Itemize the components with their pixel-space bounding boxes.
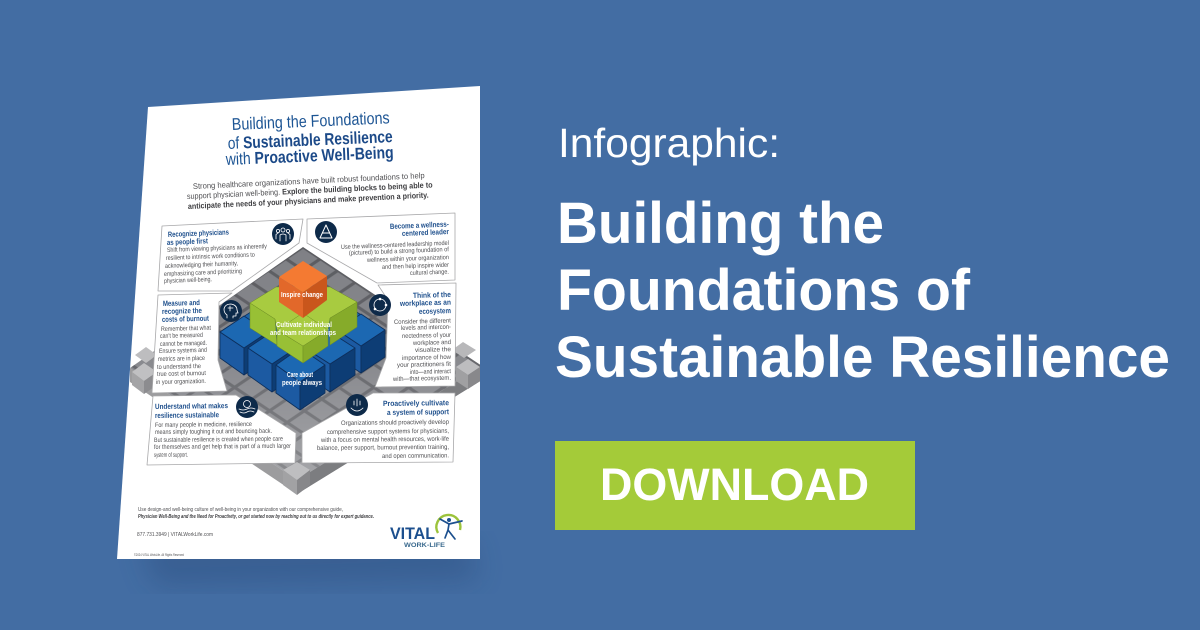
panel: sustainable resilience: resilience sustainable <box>155 410 219 420</box>
panel: system of support: a system of support <box>387 407 449 417</box>
cube labels: Care about <box>287 370 313 379</box>
green cube layer <box>250 287 357 363</box>
panel: sustainable resilience: But sustainable resilience is created when people care <box>154 436 283 444</box>
page intro text <box>187 171 433 211</box>
panel: workplace ecosystem: levels and intercon- <box>401 324 451 332</box>
panel: measure burnout: metrics are in place <box>158 355 205 363</box>
icon: bounce <box>236 396 258 418</box>
main heading: Building the <box>557 191 884 256</box>
page intro text: Strong healthcare organizations have built robust foundations to help <box>193 171 425 191</box>
icon: ecosystem <box>369 294 391 316</box>
cube labels <box>270 290 336 387</box>
panel: workplace ecosystem: with—that ecosystem. <box>392 375 451 383</box>
panel: recognize physicians: Shift from viewing physicians as inherently <box>167 243 268 254</box>
panel: recognize physicians <box>158 219 303 291</box>
panel: wellness-centered leader: Use the wellness-centered leadership model <box>341 240 449 251</box>
icon: people <box>272 223 294 245</box>
panel: recognize physicians: as people first <box>167 236 208 247</box>
panel: sustainable resilience: For many people in medicine, resilience <box>155 421 252 429</box>
panel: workplace ecosystem: nectedness of your <box>402 332 452 340</box>
panel: recognize physicians: physician well-being. <box>164 276 212 285</box>
panel: wellness-centered leader: and then help inspire wider <box>382 262 450 271</box>
panel: sustainable resilience: means simply toughing it out and bouncing back. <box>155 428 272 436</box>
panel: workplace ecosystem: importance of how <box>402 354 451 362</box>
page title: of Sustainable Resilience <box>227 127 393 153</box>
main heading: Sustainable Resilience <box>555 325 1170 390</box>
page intro text: support physician well-being. Explore the building blocks to being able to <box>187 180 433 201</box>
panel: system of support: balance, peer support, burnout prevention training, <box>317 444 449 452</box>
panel: measure burnout: true cost of burnout <box>157 370 206 378</box>
panel: sustainable resilience <box>147 395 296 465</box>
panel: wellness-centered leader: Become a wellness- <box>390 220 449 231</box>
panel: recognize physicians: resilient to intrinsic work conditions to <box>166 252 255 262</box>
cube labels: Cultivate individual <box>276 320 332 329</box>
cube labels: and team relationships <box>270 328 336 337</box>
panel: workplace ecosystem: into—and interact <box>410 368 451 376</box>
grey tile floor <box>130 247 482 495</box>
panel: wellness-centered leader: (pictured) to build a strong foundation of <box>349 246 449 257</box>
icon: pyramid <box>315 221 337 243</box>
page title <box>225 108 394 169</box>
main heading: Foundations of <box>557 258 971 323</box>
page title: with Proactive Well-Being <box>225 143 394 169</box>
panel: measure burnout: Measure and <box>163 298 200 308</box>
panel: measure burnout: costs of burnout <box>162 314 209 324</box>
panel: workplace ecosystem: your practitioners fit <box>397 361 451 369</box>
cube labels: Inspire change <box>281 290 323 299</box>
panel: measure burnout: recognize the <box>162 306 202 316</box>
panel: wellness-centered leader: centered leader <box>402 227 449 238</box>
panel: system of support: Organizations should proactively develop <box>341 419 449 427</box>
panel: recognize physicians: emphasizing care and prioritizing <box>164 268 242 278</box>
panel: system of support: comprehensive support systems for physicians, <box>327 428 449 436</box>
panel: sustainable resilience: for themselves and get help that is part of a much larger <box>154 443 292 451</box>
panel: system of support <box>302 393 455 463</box>
panel: wellness-centered leader <box>307 213 455 283</box>
panel: recognize physicians: acknowledging their humanity, <box>165 260 238 270</box>
infographic page preview <box>117 86 482 559</box>
logo: VITAL WorkLife: WORK-LIFE <box>404 542 446 549</box>
page footer text: Physician Well-Being and the Need for Proactivity, or get started now by reaching out to us directly for expert guidance. <box>138 514 374 520</box>
panel: workplace ecosystem: workplace and <box>412 339 451 347</box>
blue cube layer <box>220 278 385 410</box>
panel: workplace ecosystem: ecosystem <box>419 306 451 316</box>
panel: workplace ecosystem: Consider the different <box>394 318 451 326</box>
panel: measure burnout: to understand the <box>157 363 201 371</box>
main heading <box>555 191 1170 390</box>
panel: recognize physicians: Recognize physicians <box>168 227 229 239</box>
panel: measure burnout: cannot be managed. <box>160 340 207 348</box>
label: Infographic: Infographic: <box>558 120 780 166</box>
icon: support <box>346 394 368 416</box>
orange cube <box>279 261 327 318</box>
panel: wellness-centered leader: wellness within your organization <box>366 254 449 264</box>
panel: system of support: Proactively cultivate <box>383 398 449 408</box>
panel: measure burnout: can't be measured <box>160 332 203 340</box>
panel: workplace ecosystem: visualize the <box>415 346 451 354</box>
panel: workplace ecosystem: workplace as an <box>399 298 451 308</box>
panel: measure burnout <box>152 293 232 393</box>
panel: measure burnout: in your organization. <box>156 378 206 386</box>
panel: measure burnout: Remember that what <box>161 325 211 333</box>
panel: workplace ecosystem <box>375 283 456 387</box>
download button <box>555 441 915 530</box>
panel: measure burnout: Ensure systems and <box>159 347 207 355</box>
cube labels: people always <box>282 378 322 387</box>
page title: Building the Foundations <box>231 108 390 134</box>
download button: DOWNLOAD <box>600 459 869 510</box>
panel: workplace ecosystem: Think of the <box>413 290 451 300</box>
page intro text: anticipate the needs of your physicians and make prevention a priority. <box>188 191 429 211</box>
logo: VITAL WorkLife <box>390 515 462 549</box>
panel: wellness-centered leader: cultural change. <box>410 269 449 277</box>
logo: VITAL WorkLife: VITAL <box>390 524 435 543</box>
page footer text: Use design-and well-being culture of well-being in your organization with our comprehensive guide, <box>138 507 343 513</box>
icon: head <box>220 300 242 322</box>
panel: sustainable resilience: system of support. <box>154 452 188 459</box>
page footer text: ©2024 VITAL WorkLife. All Rights Reserved <box>134 553 184 557</box>
page footer text: 877.731.3949 | VITALWorkLife.com <box>137 532 213 538</box>
panel: system of support: with a focus on mental health resources, work-life <box>320 436 449 444</box>
panel: system of support: and open communication. <box>382 452 449 460</box>
paper shadow <box>140 540 478 585</box>
page footer text <box>134 507 374 557</box>
panel: sustainable resilience: Understand what makes <box>155 401 228 411</box>
